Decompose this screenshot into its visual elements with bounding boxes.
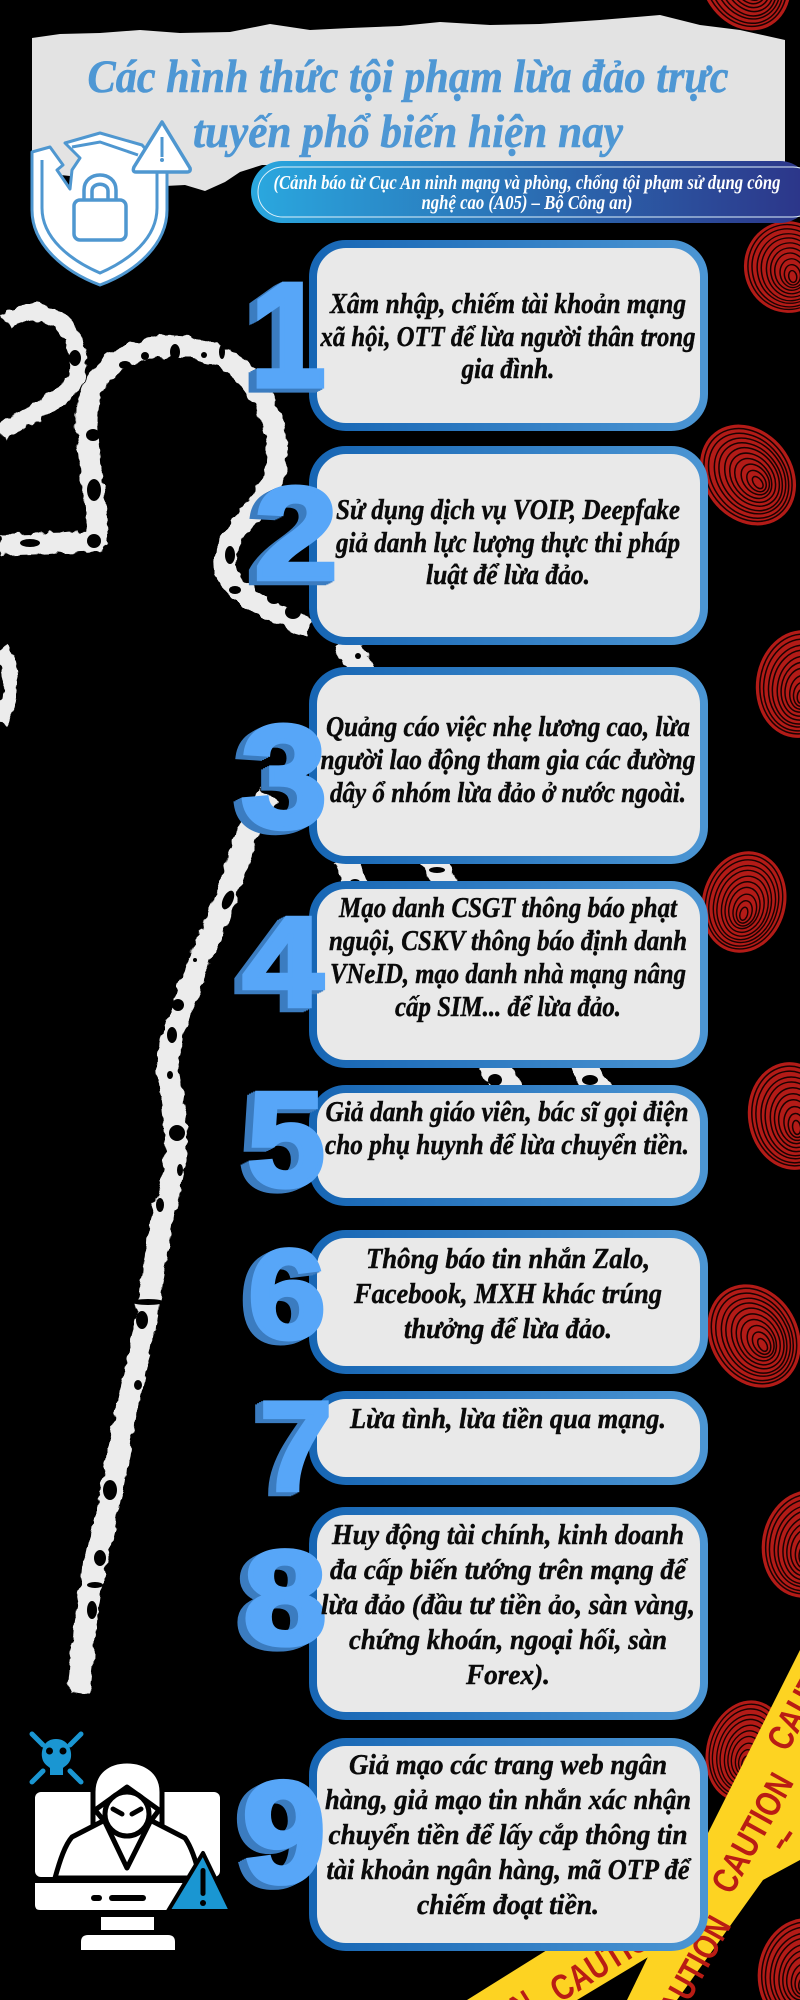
text 9: Giả mạo các trang web ngân	[349, 1750, 667, 1781]
text 8: Forex).	[465, 1660, 550, 1691]
box 9	[313, 1742, 704, 1947]
text 1: xã hội, OTT để lừa người thân trong	[320, 322, 696, 353]
text 5: Giả danh giáo viên, bác sĩ gọi điện	[326, 1097, 688, 1128]
fingerprint 4	[749, 624, 800, 744]
text 8: lừa đảo (đầu tư tiền ảo, sàn vàng,	[321, 1590, 695, 1621]
text 6: thưởng để lừa đảo.	[404, 1314, 612, 1345]
fingerprint 7	[689, 1267, 800, 1405]
item 2	[254, 450, 704, 641]
text 6: Thông báo tin nhắn Zalo,	[366, 1244, 650, 1275]
fingerprint 3	[680, 405, 800, 545]
warning triangle	[168, 1853, 231, 1911]
text 7: Lừa tình, lừa tiền qua mạng.	[349, 1404, 666, 1435]
subtitle pill: nghệ cao (A05) – Bộ Công an)	[422, 192, 632, 214]
number 6: 6	[248, 1224, 326, 1366]
text 3	[320, 712, 696, 809]
number 3: 3	[241, 695, 327, 858]
text 1	[320, 289, 696, 385]
number 7: 7	[260, 1376, 332, 1518]
text 5	[325, 1097, 689, 1161]
item 5	[247, 1065, 704, 1215]
text 9: chuyển tiền để lấy cắp thông tin	[328, 1820, 688, 1851]
text 3: người lao động tham gia các đường	[320, 745, 696, 776]
text 6	[353, 1244, 662, 1345]
item 4	[243, 885, 704, 1064]
box 5	[313, 1089, 704, 1202]
text 8: đa cấp biến tướng trên mạng để	[330, 1555, 688, 1586]
item 3	[241, 671, 704, 860]
text 5: cho phụ huynh để lừa chuyển tiền.	[325, 1130, 689, 1161]
item 8	[243, 1511, 704, 1716]
icon: padlock	[74, 175, 126, 240]
title: Các hình thức tội phạm lừa đảo trực	[88, 51, 729, 103]
text 2: Sử dụng dịch vụ VOIP, Deepfake	[336, 495, 680, 526]
item 9	[242, 1742, 704, 1947]
text 3: Quảng cáo việc nhẹ lương cao, lừa	[326, 712, 690, 743]
text 6: Facebook, MXH khác trúng	[353, 1279, 662, 1310]
title	[88, 51, 729, 158]
text 2	[335, 495, 680, 591]
text 2: luật để lừa đảo.	[426, 560, 590, 591]
hacker	[55, 1761, 200, 1878]
text 8: Huy động tài chính, kinh doanh	[331, 1520, 684, 1551]
box 7	[313, 1395, 704, 1481]
torn paper header	[32, 15, 785, 191]
black chalk spots	[20, 344, 598, 1619]
box 6	[313, 1234, 704, 1370]
text 9	[325, 1750, 692, 1921]
fingerprint 9	[694, 1691, 798, 1811]
subtitle pill	[251, 161, 800, 223]
text 9: hàng, giả mạo tin nhắn xác nhận	[325, 1785, 691, 1816]
text 9: chiếm đoạt tiền.	[417, 1890, 599, 1921]
fingerprint 1	[682, 0, 800, 46]
text 4: nguội, CSKV thông báo định danh	[329, 926, 687, 957]
fingerprint 10	[749, 1911, 800, 2000]
box 4	[313, 885, 704, 1064]
text 4	[329, 893, 687, 1023]
box 8	[313, 1511, 704, 1716]
item 6	[248, 1224, 704, 1370]
text 8: chứng khoán, ngoại hối, sàn	[349, 1625, 667, 1656]
fingerprint 5	[690, 842, 798, 962]
text 4: cấp SIM... để lừa đảo.	[395, 992, 621, 1023]
item 1	[250, 244, 704, 427]
title: tuyến phổ biến hiện nay	[193, 106, 623, 158]
caution tape	[410, 1623, 800, 2000]
box 1	[313, 244, 704, 427]
box 3	[313, 671, 704, 860]
monitor	[35, 1792, 220, 1950]
text 9: tài khoản ngân hàng, mã OTP để	[326, 1855, 692, 1886]
icon: skull and crossbones	[32, 1734, 81, 1782]
text 8	[321, 1520, 695, 1691]
box 2	[313, 450, 704, 641]
icon: hacker at monitor	[35, 1761, 231, 1950]
chalk outline of body	[0, 312, 602, 1692]
text 3: dây ổ nhóm lừa đảo ở nước ngoài.	[330, 778, 686, 809]
number 1: 1	[250, 253, 326, 418]
item 7	[260, 1376, 704, 1518]
number 9: 9	[242, 1753, 326, 1913]
text 1: gia đình.	[461, 354, 554, 385]
text 2: giả danh lực lượng thực thi pháp	[335, 528, 680, 559]
number 5: 5	[247, 1065, 325, 1215]
text 1: Xâm nhập, chiếm tài khoản mạng	[329, 289, 686, 320]
number 8: 8	[243, 1523, 327, 1673]
fingerprint 8	[753, 1483, 800, 1605]
icon: broken shield with lock and warning	[32, 122, 190, 285]
text 4: VNeID, mạo danh nhà mạng nâng	[330, 959, 686, 990]
icon: warning triangle	[133, 122, 190, 172]
number 2: 2	[254, 459, 338, 607]
fingerprint 6	[741, 1056, 800, 1176]
number 4: 4	[243, 890, 323, 1033]
fingerprint 2	[737, 214, 800, 320]
text 4: Mạo danh CSGT thông báo phạt	[338, 893, 678, 924]
